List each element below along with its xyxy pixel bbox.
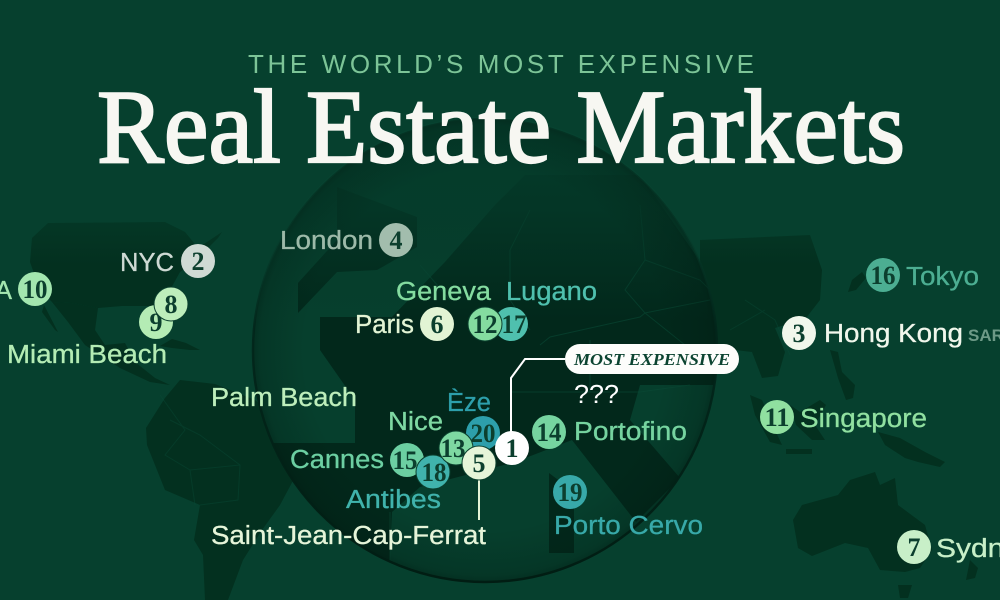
marker 8: Palm Beach [154,287,357,412]
map: New Guinea [878,432,945,467]
map: Australia [793,472,932,572]
marker 18: Antibes: Antibes [346,486,441,514]
marker 11: Singapore: Singapore [800,405,927,433]
leader line: most expensive [511,359,565,435]
marker 18: Antibes: 18 [422,458,446,487]
map: North America [30,222,222,310]
callout: most expensive: MOST EXPENSIVE [573,350,730,369]
map: New Zealand [966,560,978,580]
marker 8: Palm Beach: Palm Beach [211,384,357,412]
faint map borders [160,300,790,505]
marker 19: Porto Cervo [553,475,703,540]
marker 5: Saint-Jean-Cap-Ferrat: Saint-Jean-Cap-Ferrat [211,522,486,550]
marker 6: Paris [355,307,454,341]
map: Japan [848,272,866,292]
marker 4: London [280,223,413,257]
callout: most expensive [565,344,739,374]
leader line: Saint-Jean-Cap-Ferrat [478,475,480,520]
map: Malay peninsula [750,395,782,445]
marker 15: Cannes: Cannes [290,446,384,474]
marker 13: Nice [388,408,473,465]
marker 17: Lugano: Lugano [506,278,597,306]
marker 10: LA [0,272,52,306]
circle borders [390,230,710,557]
map: South America [146,380,296,600]
marker 3: Hong Kong: Hong Kong [824,320,963,348]
marker 3: Hong Kong: 3 [792,319,806,348]
marker 3: Hong Kong [782,316,1000,350]
marker 9: Miami Beach: Miami Beach [7,341,167,369]
marker 18: Antibes [346,455,450,514]
map: Tasmania [898,585,912,598]
circle vignette [253,118,717,582]
marker 1: mystery market: ??? [574,381,619,409]
marker 7: Sydney [897,530,1000,564]
marker 4: London: London [280,227,373,255]
top fade over the map [0,165,1000,265]
marker 5: Saint-Jean-Cap-Ferrat: 5 [472,449,486,478]
map: Philippines [830,350,855,400]
marker 15: Cannes [290,443,424,477]
marker 17: Lugano: 17 [502,310,526,339]
marker 11: Singapore [760,400,927,434]
marker 6: Paris: 6 [430,310,444,339]
marker 16: Tokyo: 16 [870,261,896,290]
marker 13: Nice: 13 [440,434,466,463]
marker 12: Geneva: Geneva [396,278,492,306]
marker 1: mystery market [495,381,619,465]
map: Sumatra [790,400,826,440]
marker 1: mystery market: 1 [506,434,518,463]
marker 14: Portofino: 14 [536,418,562,447]
marker 9: Miami Beach [7,305,173,369]
circle sea [253,118,717,582]
marker 19: Porto Cervo: 19 [558,478,582,507]
marker 9: Miami Beach: 9 [150,308,162,337]
circle top fade [326,175,680,254]
magnifier circle [250,118,720,590]
marker 6: Paris: Paris [355,311,414,339]
marker 5: Saint-Jean-Cap-Ferrat [211,446,496,550]
marker 17: Lugano [494,278,597,341]
marker 2: NYC: 2 [192,247,204,276]
subtitle: THE WORLD’S MOST EXPENSIVE [248,49,754,79]
map: East Asia [700,235,822,378]
marker 20: Eze: 20 [470,419,496,448]
circle outline [253,118,717,582]
main heading: Real Estate Markets [97,68,905,185]
marker 20: Eze: Èze [447,388,491,417]
marker 12: Geneva [396,278,502,341]
map: Caribbean [160,339,200,350]
marker 12: Geneva: 12 [472,310,498,339]
map: Baja [42,305,58,332]
world map: outer continents [30,222,978,600]
marker 11: Singapore: 11 [764,403,790,432]
map: Mexico and Central America [52,302,170,385]
title [97,49,905,185]
map: Java [786,449,812,454]
marker 13: Nice: Nice [388,408,443,436]
marker 7: Sydney: 7 [908,533,920,562]
marker 15: Cannes: 15 [392,446,418,475]
marker 14: Portofino [532,415,687,449]
marker 10: LA: 10 [22,275,48,304]
marker 19: Porto Cervo: Porto Cervo [554,512,703,540]
marker 8: Palm Beach: 8 [164,290,178,319]
marker 16: Tokyo [866,258,979,292]
marker 16: Tokyo: Tokyo [906,263,979,291]
marker 2: NYC: NYC [120,249,174,277]
marker 14: Portofino: Portofino [574,418,687,446]
marker 20: Eze [447,388,500,450]
marker 2: NYC [120,244,215,278]
marker 4: London: 4 [390,226,402,255]
circle land [274,220,716,560]
